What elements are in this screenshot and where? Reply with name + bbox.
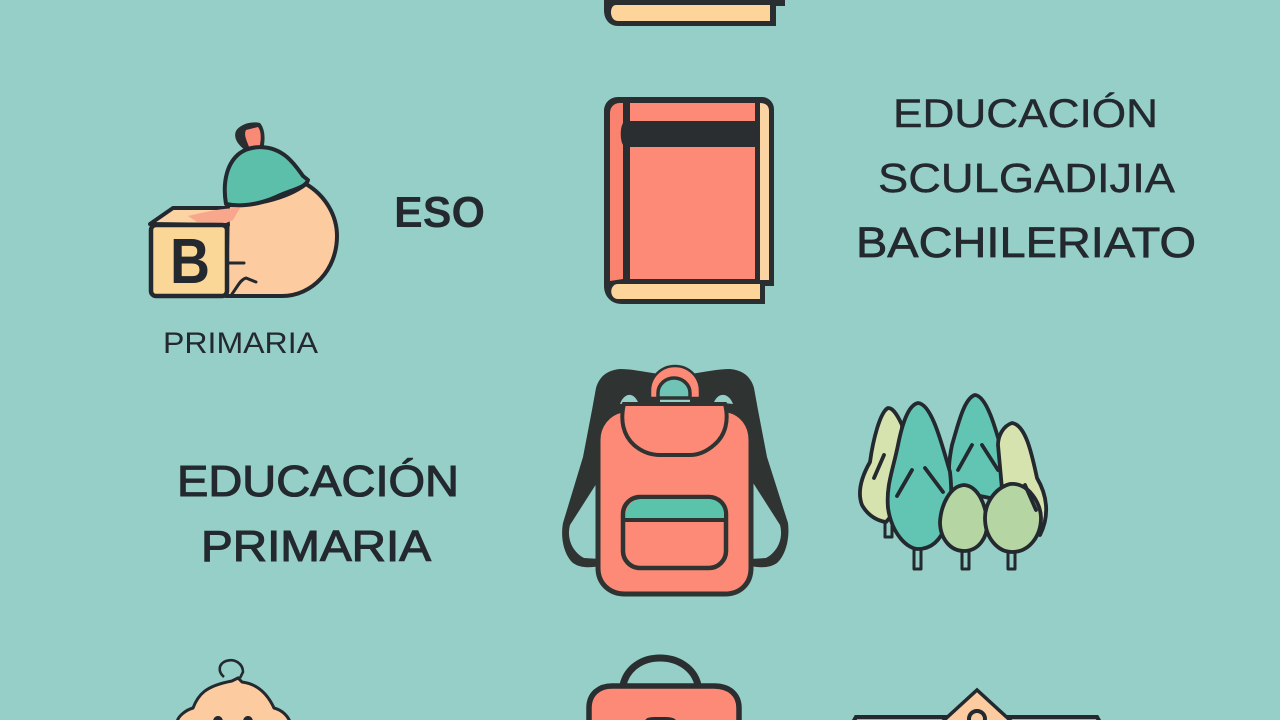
pompom highlight xyxy=(245,127,261,150)
book cover edge xyxy=(604,0,785,26)
school clock xyxy=(969,711,985,720)
book cover panel xyxy=(630,103,755,279)
backpack body xyxy=(598,410,751,594)
icon: block front xyxy=(151,225,227,296)
backpack handle xyxy=(650,366,700,398)
backpack pocket xyxy=(623,497,726,568)
handle hole xyxy=(658,378,690,398)
icon: red book xyxy=(604,97,774,304)
icon: block letter B: B xyxy=(170,225,210,297)
pocket seam xyxy=(624,518,726,522)
pale tree left xyxy=(860,408,905,522)
book spine panel xyxy=(610,103,623,281)
label: ESO: ESO xyxy=(394,188,485,237)
left strap xyxy=(562,369,660,567)
text: EDUCACIÓN SCULGADIJIA BACHILERIATO xyxy=(856,91,1196,267)
pale tree right xyxy=(998,423,1046,535)
icon: backpack xyxy=(562,366,788,594)
icon: trees xyxy=(860,395,1046,569)
bag clasp xyxy=(645,717,677,720)
icon: partial book top xyxy=(604,0,785,26)
icon: baby leg lines xyxy=(228,263,256,294)
icon: arm xyxy=(188,208,240,223)
icon: baby body xyxy=(226,184,337,296)
line 1: EDUCACIÓN xyxy=(893,91,1158,136)
line 1: EDUCACIÓN xyxy=(177,457,459,506)
book pages xyxy=(611,5,770,21)
book bottom pages xyxy=(611,284,760,299)
school roof band xyxy=(852,717,1101,720)
icon: block top xyxy=(150,208,228,225)
school gable xyxy=(942,690,1012,720)
teal tree centre xyxy=(888,403,951,549)
icon: school building xyxy=(852,690,1101,720)
label: EDUCACIÓN PRIMARIA xyxy=(177,457,459,571)
icon: red bag xyxy=(589,658,739,720)
bag handle xyxy=(623,658,698,685)
tree branches xyxy=(874,445,1036,510)
icon: green hat xyxy=(225,147,308,205)
backpack flap xyxy=(622,404,727,455)
strap gaps xyxy=(620,395,733,404)
baby curl xyxy=(220,660,243,678)
icon: hat pompom xyxy=(235,122,265,155)
book band xyxy=(621,121,758,147)
green bush middle xyxy=(940,485,987,551)
right strap xyxy=(690,369,788,567)
line 2: PRIMARIA xyxy=(201,522,432,571)
bag body xyxy=(589,686,739,720)
line 3: BACHILERIATO xyxy=(856,219,1196,267)
teal tree back right xyxy=(949,395,1005,500)
label: PRIMARIA: PRIMARIA xyxy=(163,327,318,360)
tree trunks xyxy=(885,520,1015,569)
baby face xyxy=(177,678,290,720)
pocket teal top xyxy=(626,499,724,519)
book outer cover xyxy=(604,97,774,304)
icon: baby head xyxy=(177,660,290,720)
green bush right xyxy=(985,484,1041,552)
book page strip xyxy=(760,103,769,280)
line 2: SCULGADIJIA xyxy=(878,155,1176,201)
baby eyes xyxy=(213,716,253,720)
icon: baby with block xyxy=(150,122,337,297)
